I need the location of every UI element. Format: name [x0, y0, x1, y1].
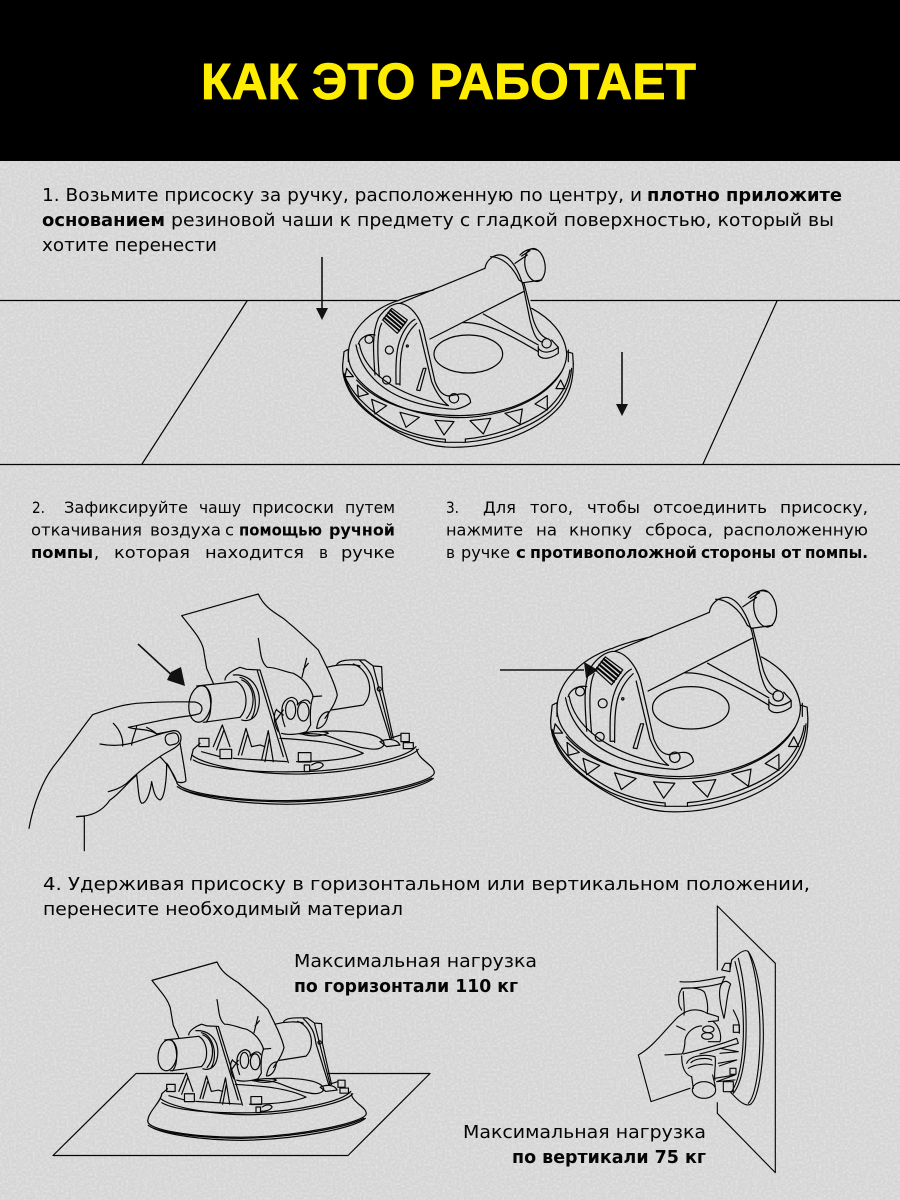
step 3 text: с — [516, 543, 526, 562]
step 3 text: от — [781, 543, 802, 562]
step 1 text: 1. Возьмите присоску за ручку, расположенную по центру, и — [42, 186, 642, 206]
step 2 text: ручке — [341, 543, 395, 562]
horizontal load label: Максимальная нагрузка — [294, 951, 537, 972]
step 1 text: основанием — [42, 211, 165, 231]
step 3 text: стороны — [701, 543, 776, 562]
hand holding suction cup vertically — [638, 906, 775, 1173]
step 3 text: присоску, — [780, 498, 868, 517]
surface plane for step 1 — [0, 300, 900, 464]
step 2 text: Зафиксируйте — [64, 498, 188, 517]
arrow: press pump — [138, 644, 185, 686]
vertical surface plane — [717, 906, 775, 1173]
surface plane for horizontal hold — [53, 1074, 430, 1156]
step 3 text: на — [536, 520, 557, 540]
step 2 text: путем — [345, 498, 395, 517]
step 3 text: кнопку — [569, 520, 632, 540]
vertical load label: по вертикали 75 кг — [512, 1147, 706, 1168]
step 3 text: 3. — [446, 498, 459, 517]
step 1 text: плотно приложите — [647, 186, 842, 206]
step 2 text: 2. — [32, 498, 45, 517]
step 2 text: присоски — [252, 498, 334, 517]
step 2 text: чашу — [199, 498, 241, 517]
hand holding suction cup horizontally — [148, 962, 366, 1140]
arrow: press down right — [616, 352, 628, 416]
suction cup illustration step 1 — [343, 247, 573, 447]
step 2 text: помпы — [31, 543, 93, 562]
step 3 text: расположенную — [723, 520, 868, 540]
step 2 text: находится — [205, 543, 304, 562]
arrow: press down left — [316, 257, 328, 320]
arrow: press release button — [500, 662, 598, 678]
step 1 text: хотите перенести — [42, 236, 217, 256]
step 2 text: в — [319, 543, 328, 562]
horizontal load label: по горизонтали 110 кг — [294, 976, 518, 997]
vertical load label: Максимальная нагрузка — [463, 1122, 706, 1143]
step 4 text: 4. Удерживая присоску в горизонтальном или вертикальном положении, — [43, 875, 810, 895]
step 3 text: Для — [483, 498, 516, 517]
left hand — [29, 702, 202, 851]
step 2 text: , — [94, 543, 99, 562]
title: КАК ЭТО РАБОТАЕТ — [201, 53, 696, 110]
title banner — [0, 0, 900, 161]
step 1 text: резиновой чаши к предмету с гладкой поверхностью, который вы — [171, 211, 834, 231]
step 3 text: нажмите — [446, 520, 523, 540]
step 3 text: в — [446, 543, 455, 562]
step 2 text: откачивания — [31, 520, 142, 540]
step 2 text: воздуха — [150, 520, 221, 540]
step 3 text: ручке — [461, 543, 510, 562]
step 3 text: отсоединить — [653, 498, 767, 517]
step 2 text: с — [225, 520, 234, 540]
hand pressing pump on suction cup step 2 — [29, 594, 434, 851]
step 3 text: чтобы — [587, 498, 640, 517]
step 2 text: помощью — [239, 520, 322, 540]
step 2 text: которая — [114, 543, 190, 562]
step 3 text: противоположной — [530, 543, 697, 562]
suction cup illustration step 3 — [551, 588, 808, 812]
cup left edge — [148, 1094, 162, 1121]
step 3 text: того, — [530, 498, 573, 517]
step 4 text: перенесите необходимый материал — [43, 900, 403, 920]
step 2 text: ручной — [329, 520, 395, 540]
step 3 text: помпы. — [805, 543, 868, 562]
step 3 text: сброса, — [645, 520, 713, 540]
